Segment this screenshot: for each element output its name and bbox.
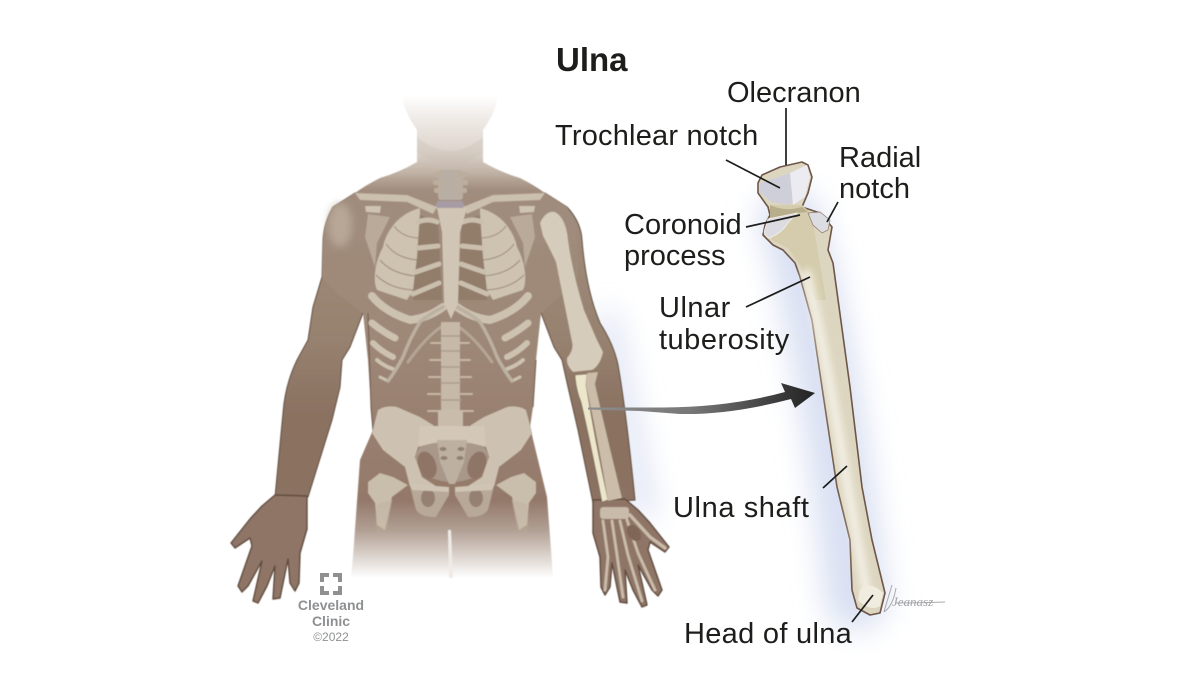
coronoid surface: [764, 213, 797, 238]
left clavicle and scapula: [355, 193, 437, 267]
label: Radial notch: Radial: [839, 142, 921, 174]
shaft highlight: [806, 270, 868, 600]
logo text: Clinic: [312, 613, 350, 629]
distal highlight: [858, 586, 883, 608]
waist shadow: [371, 407, 373, 430]
label: Ulnar tuberosity: tuberosity: [659, 324, 790, 356]
right ilium: [464, 406, 532, 487]
cervical spine: [433, 170, 468, 200]
large ulna bone: [758, 162, 885, 615]
logo text: [298, 597, 364, 644]
label: Ulna shaft: Ulna shaft: [673, 492, 810, 524]
left half of rib cage: [372, 208, 443, 381]
right arm: [500, 193, 635, 503]
icon: left hand: [231, 495, 307, 603]
trachea patch: [434, 201, 466, 210]
right half of rib cage: [457, 208, 528, 381]
body figure: [231, 95, 669, 607]
skeleton: [355, 170, 665, 601]
ulna outline and shaft: [758, 162, 885, 615]
label: Coronoid process: Coronoid: [624, 209, 742, 241]
right clavicle and scapula: [463, 193, 545, 267]
femurs: [368, 473, 408, 530]
neck tint: [770, 205, 808, 218]
medial rib stripes: [413, 220, 439, 294]
icon: Cleveland Clinic logo: [320, 573, 342, 595]
signature: [884, 585, 945, 612]
torso: [322, 95, 578, 578]
upper ribs: [375, 208, 420, 300]
label: Olecranon: Olecranon: [727, 77, 861, 109]
leader lines: [726, 108, 873, 622]
label: Coronoid process: process: [624, 240, 726, 272]
trochlear notch surface: [760, 165, 810, 205]
pelvis: [368, 406, 536, 535]
label: Radial notch: notch: [839, 173, 910, 205]
humerus: [540, 212, 603, 372]
vertebral processes: [428, 343, 473, 411]
right hand bones: [600, 507, 665, 601]
logo text: ©2022: [313, 630, 349, 644]
radius: [586, 372, 622, 501]
logo text: Cleveland: [298, 597, 364, 613]
label: Ulnar tuberosity: Ulnar: [659, 292, 731, 324]
title: Ulna: [556, 41, 628, 78]
lower ribs: [372, 296, 443, 381]
cartilage shade: [413, 215, 442, 300]
sternum: [437, 208, 467, 319]
shoulder highlights: [328, 203, 352, 247]
radial notch surface: [808, 212, 830, 233]
central top band: [418, 426, 486, 447]
rim tint: [770, 205, 826, 300]
label: Head of ulna: Head of ulna: [684, 618, 853, 650]
arrow: [588, 383, 815, 414]
label: Trochlear notch: Trochlear notch: [555, 120, 758, 152]
lumbar spine: [438, 322, 463, 430]
pubic arch: [410, 486, 449, 517]
left arm: [275, 193, 400, 497]
sacrum basin: [416, 434, 488, 482]
pubic top band: [410, 484, 494, 492]
icon: right hand: [593, 499, 669, 607]
thigh gap: [448, 530, 453, 578]
signature: Jeanasz: [892, 594, 933, 609]
neck jaw shadow: [417, 137, 483, 166]
left ilium: [372, 406, 440, 487]
blue glow behind the bones: [608, 220, 856, 600]
sacrum: [437, 440, 467, 484]
ulna small, highlighted: [575, 374, 608, 502]
